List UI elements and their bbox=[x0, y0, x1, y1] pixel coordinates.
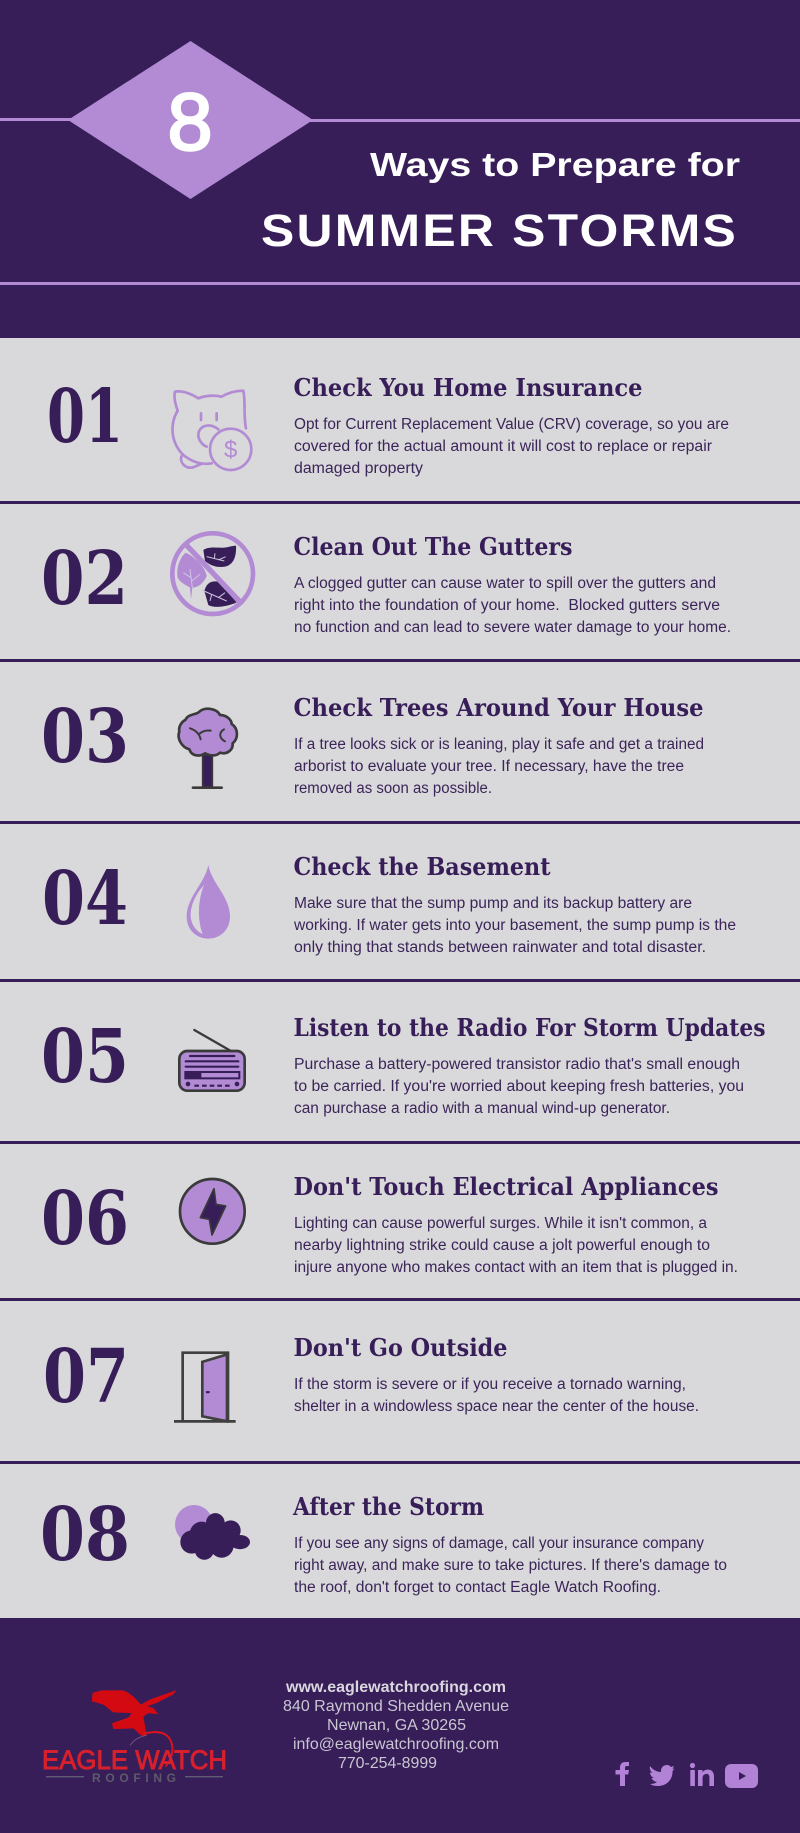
step 01 text: Opt for Current Replacement Value (CRV) coverage, so you are bbox=[294, 416, 729, 433]
step 02 text bbox=[294, 575, 731, 636]
icon: piggy bank with coin: $ bbox=[224, 437, 237, 464]
step 05 text bbox=[294, 1056, 744, 1117]
step 02 text: A clogged gutter can cause water to spill over the gutters and bbox=[294, 575, 716, 592]
number 08: 08 bbox=[40, 1492, 130, 1578]
gray list background bbox=[0, 338, 800, 1618]
icon: water drop bbox=[187, 865, 230, 939]
step 08 text: the roof, don't forget to contact Eagle Watch Roofing. bbox=[294, 1579, 661, 1596]
icon: tree bbox=[179, 709, 237, 788]
panel: step 02 bbox=[41, 532, 731, 636]
step 02 text: right into the foundation of your home. Blocked gutters serve bbox=[294, 597, 720, 614]
header panel bbox=[0, 41, 800, 285]
step 07 text bbox=[294, 1376, 699, 1415]
icon: piggy bank with coin bbox=[172, 391, 251, 470]
step 08 text: right away, and make sure to take pictures. If there's damage to bbox=[294, 1557, 727, 1574]
step 08 heading: After the Storm bbox=[292, 1492, 484, 1521]
footer logo: Eagle Watch Roofing bbox=[42, 1690, 227, 1785]
step 05 text: can purchase a radio with a manual wind-up generator. bbox=[294, 1100, 670, 1117]
icon: twitter bbox=[650, 1765, 674, 1786]
step 03 text bbox=[294, 736, 704, 797]
step 02 heading: Clean Out The Gutters bbox=[294, 532, 572, 561]
footer contact details bbox=[283, 1679, 509, 1772]
icon: youtube bbox=[725, 1764, 758, 1788]
logo subtitle: ROOFING bbox=[92, 1771, 176, 1785]
step 04 text: Make sure that the sump pump and its backup battery are bbox=[294, 895, 692, 912]
number 02: 02 bbox=[41, 536, 128, 622]
panel: step 07 bbox=[43, 1333, 699, 1421]
step 06 heading: Don't Touch Electrical Appliances bbox=[294, 1172, 718, 1201]
step 03 text: removed as soon as possible. bbox=[294, 780, 492, 797]
step 03 heading: Check Trees Around Your House bbox=[294, 693, 704, 722]
panel: step 06 bbox=[41, 1172, 738, 1276]
panel: step 05 bbox=[41, 1013, 766, 1117]
step 07 text: shelter in a windowless space near the center of the house. bbox=[294, 1398, 699, 1415]
number 03: 03 bbox=[41, 694, 129, 780]
icon: open door bbox=[174, 1353, 236, 1421]
step 05 text: Purchase a battery-powered transistor radio that's small enough bbox=[294, 1056, 740, 1073]
step 03 text: If a tree looks sick or is leaning, play it safe and get a trained bbox=[294, 736, 704, 753]
step 05 text: to be carried. If you're worried about keeping fresh batteries, you bbox=[294, 1078, 744, 1095]
social icons bbox=[616, 1762, 758, 1788]
step 06 text bbox=[294, 1215, 738, 1276]
icon: facebook bbox=[616, 1762, 629, 1786]
step 03 text: arborist to evaluate your tree. If necessary, have the tree bbox=[294, 758, 684, 775]
icon: lightning bolt bbox=[180, 1179, 245, 1244]
step 07 text: If the storm is severe or if you receive a tornado warning, bbox=[294, 1376, 686, 1393]
icon: linkedin bbox=[690, 1763, 714, 1786]
icon: no leaves bbox=[172, 533, 253, 614]
title line one: Ways to Prepare for bbox=[370, 147, 740, 184]
footer contact details: Newnan, GA 30265 bbox=[327, 1717, 466, 1734]
step 01 heading: Check You Home Insurance bbox=[294, 373, 642, 402]
step 04 text: working. If water gets into your basement, the sump pump is the bbox=[293, 917, 736, 934]
number 07: 07 bbox=[43, 1334, 129, 1420]
footer contact details: 770-254-8999 bbox=[338, 1755, 437, 1772]
step 07 heading: Don't Go Outside bbox=[294, 1333, 508, 1362]
panel: step 08 bbox=[40, 1492, 727, 1596]
diamond badge: 8 bbox=[167, 78, 213, 168]
panel: step 04 bbox=[42, 852, 736, 956]
number 05: 05 bbox=[41, 1014, 129, 1100]
footer contact details: 840 Raymond Shedden Avenue bbox=[283, 1698, 509, 1715]
icon: sun behind cloud bbox=[175, 1505, 250, 1560]
step 06 text: nearby lightning strike could cause a jolt powerful enough to bbox=[294, 1237, 710, 1254]
step 04 text: only thing that stands between rainwater and total disaster. bbox=[294, 939, 706, 956]
number 01: 01 bbox=[47, 374, 123, 460]
footer contact details: www.eaglewatchroofing.com bbox=[285, 1679, 506, 1696]
step 01 text bbox=[294, 416, 729, 477]
logo wordmark: EAGLE WATCH bbox=[42, 1745, 227, 1775]
footer contact details: info@eaglewatchroofing.com bbox=[293, 1736, 499, 1753]
step 02 text: no function and can lead to severe water damage to your home. bbox=[294, 619, 731, 636]
icon: radio bbox=[179, 1030, 245, 1091]
number 06: 06 bbox=[41, 1176, 129, 1262]
panel: step 03 bbox=[41, 693, 704, 797]
title line two: SUMMER STORMS bbox=[261, 205, 738, 256]
step 08 text: If you see any signs of damage, call your insurance company bbox=[294, 1535, 704, 1552]
icon: red eagle bbox=[92, 1690, 177, 1766]
diamond badge bbox=[68, 41, 313, 199]
step 08 text bbox=[294, 1535, 727, 1596]
step 06 text: injure anyone who makes contact with an item that is plugged in. bbox=[294, 1259, 738, 1276]
step 01 text: covered for the actual amount it will cost to replace or repair bbox=[294, 438, 712, 455]
number 04: 04 bbox=[42, 856, 128, 942]
step 04 heading: Check the Basement bbox=[294, 852, 551, 881]
step 01 text: damaged property bbox=[294, 460, 423, 477]
step 06 text: Lighting can cause powerful surges. While it isn't common, a bbox=[294, 1215, 707, 1232]
step 04 text bbox=[293, 895, 736, 956]
panel: step 01 bbox=[47, 373, 729, 477]
